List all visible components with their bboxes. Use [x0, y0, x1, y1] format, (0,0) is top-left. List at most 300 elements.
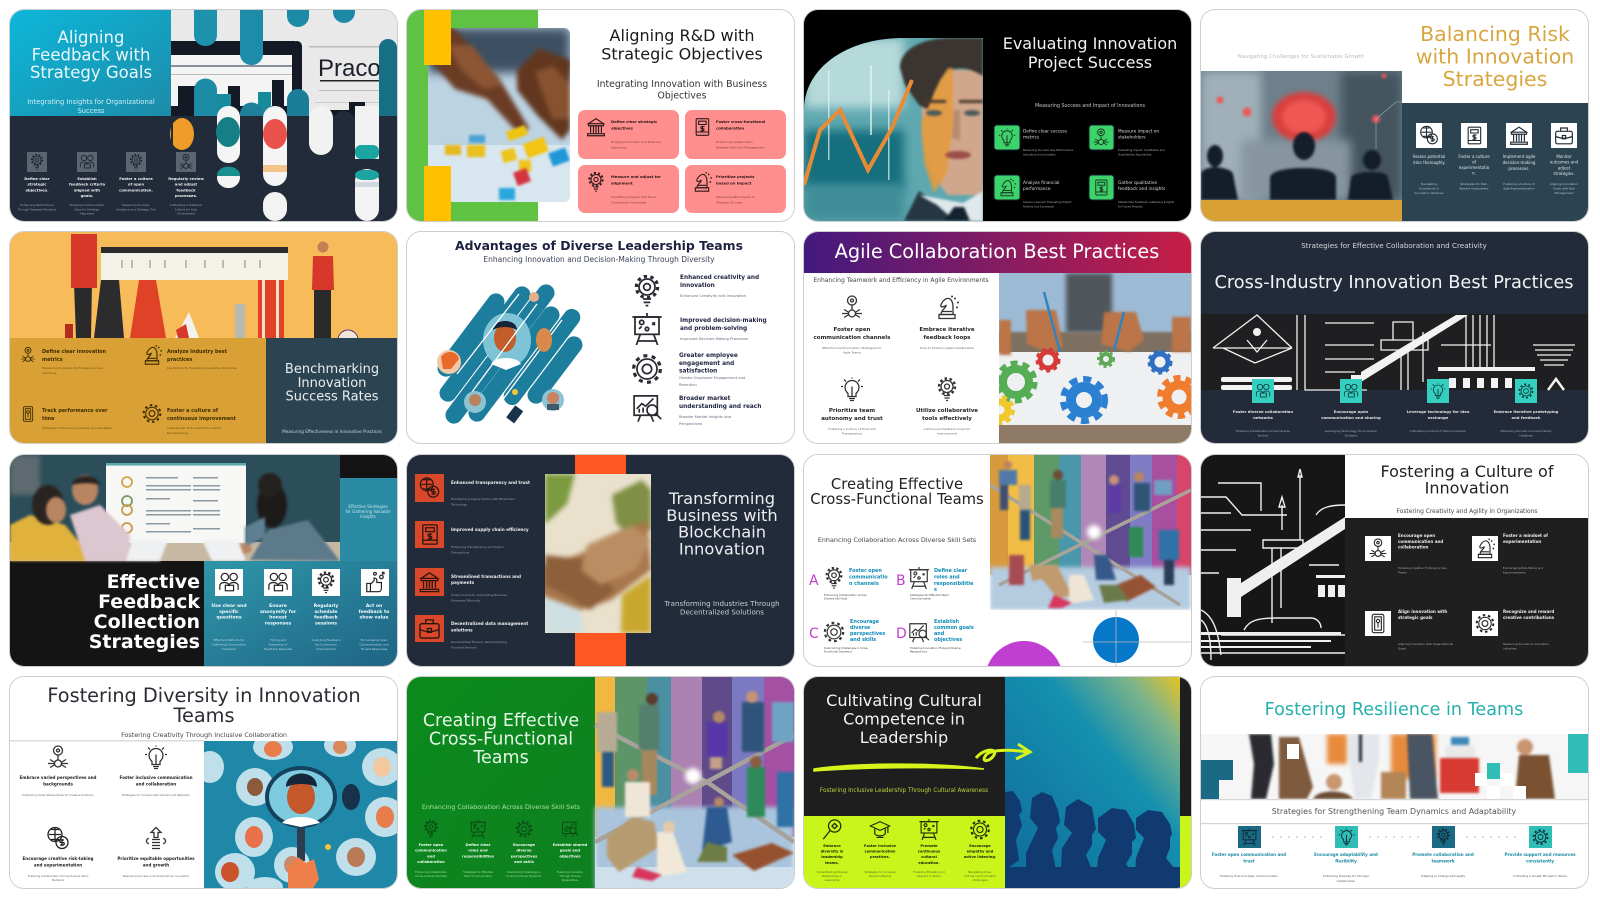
benefit: Greater employee engagement and satisfaction: Greater Employee Engagement and: [679, 376, 745, 380]
item: Foster diverse collaboration networks: Sectors: [1258, 434, 1269, 438]
item: Align innovation with strategic goals: Align innovation with: [1398, 609, 1447, 614]
item: Foster a culture of continuous improvement: Benchmarking: [167, 431, 188, 435]
item: Enhanced transparency and trust: Transforming Supply Chains with Blockchain: [451, 497, 515, 501]
title: Fostering a Culture of: [1381, 462, 1553, 481]
item: four strategy columns: feedback criteria: [69, 183, 105, 187]
item: icon row: n.: [1472, 171, 1476, 176]
item: four strategy columns: Enhancing Performance: [20, 203, 54, 207]
panel: Cultivating Cultural Competence in Leadership: [804, 677, 1191, 888]
item: icon row: Improvement: [316, 647, 337, 651]
item: Streamlined transactions and payments: payments: [451, 580, 475, 585]
item: icon row: Ensure: [269, 604, 287, 609]
item: Encourage open communication and sharing: Encourage open: [1334, 409, 1368, 414]
item: icon row: Strategies for Risk-: [1460, 182, 1488, 186]
title: Benchmarking: [285, 362, 379, 377]
item: Foster a culture of continuous improvement: [144, 405, 237, 435]
title: Cross-Industry Innovation Best Practices: [1214, 272, 1574, 293]
subtitle: Transforming Industries Through: [664, 599, 780, 608]
item: icon row: outcomes and: [1550, 160, 1579, 165]
item: icon row: Innovation Ventures: [1415, 191, 1444, 195]
item: Foster open communication and trust: [1212, 826, 1286, 878]
item: icon row: Monitor: [1556, 154, 1572, 159]
item: four strategy columns: Regularly review: [168, 177, 204, 181]
item C: perspectives: [850, 631, 885, 637]
image: diverse faces in circles and magnifier: [204, 741, 397, 888]
item: Provide support and resources consistently: consistently: [1526, 858, 1554, 864]
item: Encourage open communication and collaboration: Encourage open: [1398, 533, 1435, 538]
benefit: Broader market understanding and reach: Broader Market Insights and: [679, 415, 731, 419]
subtitle: Enhancing Collaboration Across Diverse Skill Sets: [818, 536, 977, 544]
benefit: Improved decision-making and problem-solving: Improved Decision-Making Processes: [680, 337, 748, 341]
item C: [809, 619, 885, 654]
panel background: teal header: [10, 10, 171, 116]
panel: Creating Effective Cross-Functional Teams (white): [804, 455, 1191, 666]
gold panel: [10, 338, 266, 443]
item: icon row: of: [1472, 160, 1477, 165]
panel: Aligning R&D with Strategic Objectives: [407, 10, 794, 221]
item: icon and label columns: goals and: [560, 849, 580, 853]
card: Measure and adjust for alignment: Prioritizing Projects that Drive: [611, 195, 656, 199]
item: Utilize collaborative tools effectively: Utilize collaborative: [916, 408, 978, 414]
item: Improved supply chain efficiency: Enhancing Transparency and Trust in: [451, 545, 504, 549]
item: lime column strip: Strategies for Inclusive: [865, 870, 895, 874]
panel caption: Effective Strategies: [348, 504, 388, 509]
item: Embrace iterative feedback loops: [919, 296, 975, 350]
item: Encourage open communication and sharing: communication and sharing: [1321, 415, 1381, 420]
item: Define clear success metrics: [994, 125, 1074, 156]
item: icon row: questions: [216, 615, 242, 621]
item D: Perspectives: [910, 650, 928, 654]
title: Innovation: [1425, 478, 1509, 498]
card: Define clear strategic objectives: Define clear strategic: [611, 119, 657, 124]
title: Creating Effective: [423, 711, 579, 731]
title: with Innovation: [1416, 44, 1574, 68]
item: Embrace varied perspectives and backgrounds: Embracing Varied Perspectives for Creative Solutions: [22, 793, 94, 797]
title: Innovation: [298, 376, 366, 391]
item: Recognize and reward creative contributions: Initiatives: [1503, 647, 1517, 651]
item: icon and label columns: [415, 820, 588, 882]
item: icon and label columns: collaboration: [417, 860, 445, 864]
item: lime column strip: Decision-Making: [869, 874, 891, 878]
item B: responsibilitie: [934, 581, 974, 587]
image label: Praco logotype: Praco: [318, 55, 381, 82]
card: Measure and adjust for alignment: [578, 165, 679, 213]
card: Foster cross-functional collaboration: Foster cross-functional: [716, 119, 765, 124]
title: Effective: [107, 571, 200, 593]
item: four strategy columns: and adjust: [175, 183, 197, 187]
item: Encourage creative risk-taking and experimentation: and experimentation: [34, 862, 82, 867]
item: Embrace iterative prototyping and feedback: Measuring Success in Cross-Industry: [1500, 429, 1552, 433]
subtitle: Fostering Creativity Through Inclusive Collaboration: [121, 731, 287, 739]
card: Prioritize projects based on impact: Measuring R&D Impact on: [716, 195, 755, 199]
item D: and: [934, 631, 945, 637]
image: silhouettes on blue-yellow gradient: [1005, 677, 1180, 888]
item: lime column strip: Challenges: [973, 878, 988, 882]
brush stroke: [814, 764, 984, 771]
item: icon and label columns: Perspectives: [562, 878, 579, 882]
item: Provide support and resources consistently: Provide support and resources: [1504, 852, 1576, 857]
benefit: Broader market understanding and reach: [634, 396, 761, 426]
item: Decentralized data management solutions: [415, 615, 528, 650]
item B: roles and: [934, 574, 960, 580]
subtitle: Enhancing Innovation and Decision-Making Through Diversity: [483, 255, 715, 264]
title: Leadership: [860, 728, 948, 747]
white header: [1345, 455, 1588, 518]
panel: Cross-Industry Innovation Best Practices: [1201, 232, 1588, 443]
item: Enhanced transparency and trust: Enhanced transparency and trust: [451, 480, 530, 485]
card: Prioritize projects based on impact: Prioritize projects: [716, 174, 754, 179]
item: four strategy columns: goals.: [81, 194, 94, 198]
item: lime column strip: [817, 819, 997, 882]
panel: Benchmarking Innovation Success Rates: [10, 232, 397, 443]
item: Prioritize equitable opportunities and growth: and growth: [143, 862, 169, 867]
benefit: Broader market understanding and reach: Broader market: [679, 396, 730, 402]
panel: Creating Effective Cross-Functional Teams (green): [407, 677, 794, 888]
item: Prioritize team autonomy and trust: Transparency: [841, 432, 862, 436]
panel: Agile Collaboration Best Practices: [804, 232, 1191, 443]
card: Foster cross-functional collaboration: Enhancing Collaboration: [716, 140, 753, 144]
image: people facing a red risk sphere: [1201, 71, 1402, 200]
item: four strategy columns: Achievement: [177, 212, 196, 216]
item: Encourage open communication and collaboration: collaboration: [1398, 545, 1429, 550]
item: Analyze financial performance: Failures and Successes: [1023, 204, 1054, 208]
panel: Fostering Diversity in Innovation Teams: [10, 677, 397, 888]
benefit: Greater employee engagement and satisfaction: Greater employee: [679, 353, 738, 359]
title: Feedback: [98, 591, 200, 613]
item: four strategy columns: Foster a culture: [119, 177, 153, 181]
card: Foster cross-functional collaboration: collaboration: [716, 126, 745, 130]
item: lime column strip: Cultural Communication: [964, 874, 997, 878]
item: icon row: Goals with Risk: [1553, 187, 1575, 191]
item: Encourage adaptability and flexibility: [1314, 826, 1378, 883]
item: Embrace varied perspectives and backgrounds: [20, 746, 97, 797]
item: lime column strip: Encourage: [969, 844, 991, 848]
item A: Diverse Skill Sets: [824, 596, 848, 600]
item: Utilize collaborative tools effectively: Continuous Feedback Loops for: [924, 427, 970, 431]
item: Leverage technology for idea exchange: Cultivating a Culture of Open Innovation: [1410, 429, 1466, 433]
item: Leverage technology for idea exchange: exchange: [1428, 415, 1449, 420]
subtitle: Strategies for Strengthening Team Dynamics and Adaptability: [1272, 807, 1517, 816]
item: Define clear success metrics: Measuring Success: Key Performance: [1023, 148, 1073, 152]
item: Analyze industry best practices: [145, 345, 237, 370]
card: Define clear strategic objectives: Objectives: [611, 145, 627, 149]
title: Innovation: [679, 539, 765, 558]
item: icon and label columns: and: [427, 854, 435, 858]
item: Recognize and reward creative contributions: Recognize and reward: [1503, 609, 1554, 614]
item: four strategy columns: processes.: [175, 194, 198, 198]
item: Encourage creative risk-taking and experimentation: [23, 828, 94, 882]
item: icon row: [1413, 123, 1579, 195]
item: icon row: show value: [359, 615, 389, 621]
panel: Aligning Feedback with Strategy Goals: [10, 10, 397, 221]
benefit: Greater employee engagement and satisfaction: [634, 353, 745, 387]
subtitle: Objectives: [658, 90, 707, 102]
item: Embrace iterative feedback loops: feedback loops: [924, 335, 971, 341]
item: icon row: Frequency of: [269, 643, 288, 647]
item: Decentralized data management solutions: Financial Services: [451, 646, 477, 650]
subtitle: Strategies for Effective Collaboration and Creativity: [1301, 241, 1488, 250]
item: Define clear innovation metrics: metrics: [42, 357, 63, 363]
benefit: Broader market understanding and reach: Perspectives: [679, 422, 702, 426]
item B: Communication: [910, 596, 931, 600]
item: Encourage open communication and sharing: Leveraging Technology for Innovation: [1325, 429, 1377, 433]
image: handshake over world map: [541, 474, 651, 633]
item: Improved supply chain efficiency: Improved supply chain efficiency: [451, 527, 529, 532]
item: icon row: Feedback Requests: [264, 647, 292, 651]
item: icon row: Foster a culture: [1458, 154, 1490, 159]
item: Foster open communication channels: Effective Communication Strategies for: [822, 346, 882, 350]
item: icon and label columns: diverse: [516, 849, 532, 853]
item: icon row: Gathering Constructive: [212, 643, 246, 647]
item B: B: [896, 573, 906, 589]
item: Track performance over time: Strategies to Enhance Innovation Success Rates: [42, 426, 112, 430]
item: Improved supply chain efficiency: Transactions: [450, 550, 470, 554]
subtitle: Fostering Creativity and Agility in Organizations: [1397, 509, 1537, 515]
item D: Fostering Innovation Through Diverse: [910, 646, 961, 650]
panel: Effective Feedback Collection Strategies: [10, 455, 397, 666]
item: lime column strip: Promote: [920, 844, 938, 848]
item: Foster open communication and trust: trust: [1243, 858, 1255, 864]
item: Prioritize equitable opportunities and growth: Measuring Success in Diversity-Driven Innovation: [123, 874, 190, 878]
title: Advantages of Diverse Leadership Teams: [455, 238, 743, 253]
item: Analyze financial performance: Analyze financial: [1023, 181, 1059, 186]
item D: [896, 619, 974, 654]
item: Encourage adaptability and flexibility: Collaboration: [1337, 879, 1356, 883]
item: Analyze industry best practices: Analyze industry best: [167, 349, 227, 355]
item: icon and label columns: responsibilities: [462, 854, 495, 858]
benefit: Enhanced creativity and innovation: Enhanced creativity and: [680, 275, 759, 281]
item: Measure impact on stakeholders: Measure impact on: [1118, 130, 1159, 134]
item: icon row: Aligning Innovation: [1550, 182, 1578, 186]
title: Collection: [94, 611, 200, 633]
item: Gather qualitative feedback and insights: [1089, 175, 1175, 208]
item: Encourage open communication and collaboration: communication and: [1398, 539, 1443, 544]
subtitle: Success: [78, 107, 105, 115]
item: Prioritize equitable opportunities and growth: [117, 828, 195, 878]
image: stressed business team with blocks: [1201, 734, 1588, 799]
item: Measure impact on stakeholders: Evaluating Impact: Qualitative and: [1118, 148, 1165, 152]
item C: Encourage: [850, 619, 879, 625]
item: Align innovation with strategic goals: Aligning Innovation with Organizational: [1398, 642, 1453, 646]
gold bar: [1201, 200, 1402, 221]
panel: Fostering a Culture of Innovation: [1201, 455, 1588, 666]
illustration: workers measuring with a large ruler: [65, 234, 358, 350]
item: lime column strip: Fostering Empathy and: [913, 870, 945, 874]
item: four strategy columns: Alignment: [80, 212, 95, 216]
item: lime column strip: active listening.: [964, 855, 996, 859]
benefit: Greater employee engagement and satisfaction: Retention: [679, 383, 697, 387]
panel: Fostering Resilience in Teams: [1201, 677, 1588, 888]
item: lime column strip: diversity in: [821, 850, 844, 854]
item: lime column strip: Respect in Teams: [917, 874, 941, 878]
item: Promote collaboration and teamwork: Promote collaboration and: [1412, 852, 1474, 857]
item: icon row: Communication and: [359, 643, 389, 647]
title: Cross-Functional: [429, 729, 573, 749]
line art band: [1201, 314, 1588, 390]
item: Provide support and resources consistently: [1504, 826, 1576, 878]
item: Measure impact on stakeholders: stakeholders: [1118, 134, 1146, 140]
item C: Overcoming Challenges in Cross-: [824, 646, 868, 650]
title: Evaluating Innovation: [1003, 34, 1177, 53]
card: Measure and adjust for alignment: alignment: [611, 180, 633, 186]
item: Recognize and reward creative contributions: [1472, 609, 1555, 651]
item: Analyze financial performance: Lessons Learned: Evaluating Project: [1023, 200, 1071, 204]
image: hands placing sticky notes: [428, 28, 570, 202]
item: Define clear innovation metrics: [21, 347, 107, 375]
item: Foster a culture of continuous improvement: Foster a culture of: [167, 408, 218, 414]
item: icon row: Analyzing Feedback: [312, 638, 340, 642]
item: Foster open communication channels: Agile Teams: [843, 350, 861, 354]
item: Foster a culture of continuous improvement: Case Studies of Successful Innovation: [167, 426, 222, 430]
item: icon row: feedback: [314, 615, 339, 621]
item: Embrace iterative prototyping and feedback: Embrace iterative prototyping: [1494, 409, 1558, 414]
item: Analyze industry best practices: Key Metrics for Evaluating Innovation Outcomes: [167, 366, 237, 370]
card: Prioritize projects based on impact: [685, 165, 786, 213]
benefit: Improved decision-making and problem-solving: Improved decision-making: [680, 318, 767, 324]
benefit: Improved decision-making and problem-solving: and problem-solving: [680, 326, 747, 332]
arrow: hand-drawn swoosh: [976, 744, 1030, 761]
item: Promote collaboration and teamwork: Adapting to Change with Agility: [1421, 874, 1466, 878]
item: icon and label columns: roles and: [468, 849, 488, 853]
item: icon and label columns: Cross-Functional Dynamics: [506, 874, 542, 878]
title: Fostering Resilience in Teams: [1265, 700, 1523, 720]
card: Foster cross-functional collaboration: Between R&D and Management: [716, 145, 765, 149]
item: Gather qualitative feedback and insights: feedback and insights: [1118, 186, 1166, 192]
item: lime column strip: leadership: [821, 855, 843, 859]
card: Foster cross-functional collaboration: [685, 110, 786, 159]
item: Define clear success metrics: metrics: [1023, 134, 1040, 140]
item: Measure impact on stakeholders: Quantitative Approaches: [1118, 152, 1152, 156]
item: Foster inclusive communication and collaboration: [119, 746, 193, 797]
benefit: Broader market understanding and reach: understanding and reach: [679, 404, 761, 410]
item: icon row: risks thoroughly.: [1413, 160, 1445, 165]
item: four strategy columns: [17, 152, 204, 216]
item: Foster a culture of continuous improvement: continuous improvement: [167, 416, 237, 422]
item: lime column strip: continuous: [918, 850, 940, 854]
item: Streamlined transactions and payments: Streamlined transactions and: [451, 574, 521, 579]
item: Decentralized data management solutions: Decentralized Finance: Revolutionizing: [451, 640, 507, 644]
benefit: Greater employee engagement and satisfaction: engagement and: [679, 361, 734, 367]
item: Embrace iterative prototyping and feedback: Initiatives: [1519, 434, 1533, 438]
item: Gather qualitative feedback and insights: Stakeholder Feedback: Gathering Insights: [1118, 200, 1174, 204]
item: lime column strip: Embrace: [823, 844, 841, 848]
item: icon row: Assess potential: [1413, 154, 1445, 159]
title: Strategies: [89, 631, 200, 653]
item: Encourage creative risk-taking and experimentation: Members: [52, 878, 65, 882]
green band: [407, 10, 538, 221]
item: Decentralized data management solutions: Decentralized data management: [451, 621, 528, 626]
item D: D: [896, 626, 907, 642]
item: icon and label columns: Fostering Innovation: [557, 871, 583, 874]
item: lime column strip: practices.: [870, 855, 890, 859]
image: team on scaffolding over colour stripes: [595, 677, 794, 888]
yellow accent bars: [424, 10, 451, 221]
orange band: [575, 455, 626, 666]
item: icon row: Fostering a Culture of: [1503, 182, 1535, 186]
item: Foster diverse collaboration networks: networks: [1253, 415, 1274, 420]
item: Foster a mindset of experimentation: [1472, 533, 1548, 575]
item: icon row: Uncertainty in: [1419, 187, 1439, 191]
item: Leverage technology for idea exchange: Leverage technology for idea: [1407, 409, 1469, 414]
image: hands sketching gears on paper: [987, 273, 1198, 443]
item: Leverage technology for idea exchange: [1407, 379, 1470, 433]
item: icon and label columns: Establish shared: [553, 843, 587, 847]
illustration: diagonal stripes with diverse faces: [434, 281, 586, 427]
item: Enhanced transparency and trust: Technology: [450, 502, 467, 506]
item: Embrace iterative feedback loops: Embrace iterative: [919, 327, 975, 333]
item: icon row: Implement agile: [1503, 154, 1535, 159]
subtitle: Enhancing Teamwork and Efficiency in Agile Environments: [813, 277, 989, 284]
title: Balancing Risk: [1420, 22, 1570, 46]
item: Promote collaboration and teamwork: [1412, 826, 1474, 878]
item: four strategy columns: Cultivating a Feedback: [170, 203, 202, 207]
panel: Balancing Risk with Innovation Strategies: [1201, 10, 1588, 221]
item: icon row: Regularly: [314, 604, 338, 609]
item: icon row: Navigating: [1421, 182, 1437, 186]
item: four strategy columns: aligned with: [74, 188, 100, 192]
image: coloured columns in dark band: [170, 39, 397, 221]
item: icon row: strategies.: [1553, 171, 1575, 176]
item: Track performance over time: time: [42, 416, 55, 422]
item: icon and label columns: perspectives: [511, 854, 538, 858]
item B: Define clear: [934, 568, 967, 574]
item: Encourage open communication and sharing: [1321, 379, 1381, 438]
item: Enhanced transparency and trust: [415, 474, 530, 506]
card: Define clear strategic objectives: [578, 110, 679, 159]
item: Foster a mindset of experimentation: Foster a mindset of: [1503, 533, 1548, 538]
title: Business with: [666, 506, 778, 525]
card: Measure and adjust for alignment: Competitive Advantage: [611, 200, 647, 204]
item: icon and label columns: Overcoming Challenges in: [507, 871, 541, 874]
item: four strategy columns: of open: [128, 183, 144, 187]
item: Recognize and reward creative contributions: Measuring Success in Innovation: [1503, 642, 1549, 646]
item: icon row: Effective Methods for: [214, 638, 244, 642]
card: Measure and adjust for alignment: Measure and adjust for: [611, 174, 661, 179]
item: Define clear success metrics: Indicators for Innovation: [1023, 152, 1056, 156]
panel: Evaluating Innovation Project Success: [804, 10, 1191, 221]
item: icon row: Encouraging Open: [361, 638, 387, 642]
item: icon and label columns: Encourage: [513, 843, 535, 847]
benefit: Greater employee engagement and satisfaction: satisfaction: [679, 369, 717, 375]
item: Prioritize team autonomy and trust: autonomy and trust: [821, 416, 883, 422]
title: Aligning: [58, 28, 124, 47]
item: icon row: sessions: [315, 620, 337, 626]
item: Foster diverse collaboration networks: [1233, 379, 1293, 438]
item: Foster open communication and trust: Foster open communication and: [1212, 852, 1286, 857]
panel: Transforming Business with Blockchain Innovation: [407, 455, 794, 666]
subtitle: Integrating Insights for Organizational: [27, 98, 155, 106]
item: Improved supply chain efficiency: [415, 521, 529, 554]
panel caption: Insights: [360, 514, 376, 519]
title: Agile Collaboration Best Practices: [835, 240, 1159, 263]
item: Embrace varied perspectives and backgrounds: Embrace varied perspectives and: [20, 775, 96, 780]
item: icon and label columns: Foster open: [419, 843, 443, 847]
dark panel: [1402, 103, 1588, 221]
item: Analyze financial performance: [994, 175, 1071, 208]
item: icon row: Reward Assessment: [1459, 187, 1489, 191]
item: Encourage open communication and sharing: Solutions: [1345, 434, 1358, 438]
title: Feedback with: [32, 46, 150, 64]
item: lime column strip: empathy and: [967, 850, 994, 854]
image: man with chart overlay: [804, 38, 983, 221]
item: Foster inclusive communication and collaboration: and collaboration: [136, 782, 176, 786]
panel: Advantages of Diverse Leadership Teams: [407, 232, 794, 443]
item: Encourage adaptability and flexibility: Encourage adaptability and: [1314, 852, 1378, 857]
image: dashboard seen through pill shapes: [171, 0, 397, 116]
item: Foster open communication channels: [814, 296, 891, 354]
item: icon row: feedback to: [359, 609, 389, 615]
header band: [804, 232, 1191, 273]
